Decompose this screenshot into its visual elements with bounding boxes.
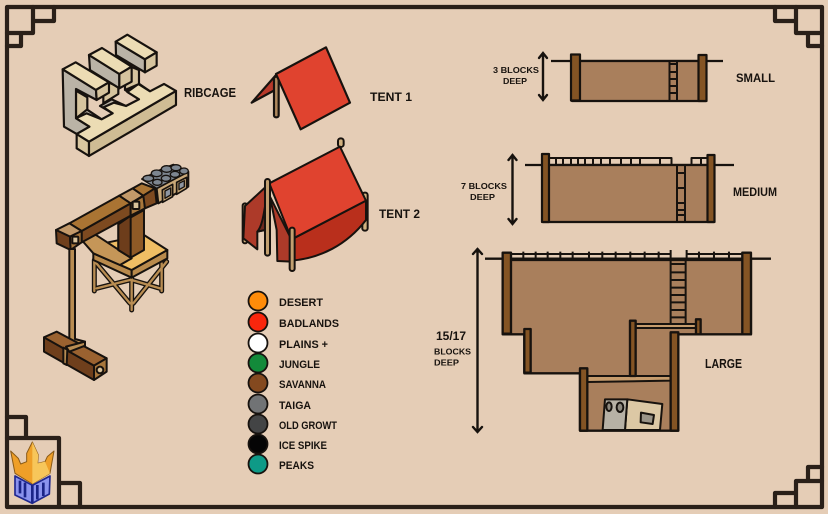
legend: taiga — [248, 394, 311, 414]
large pit ladder — [671, 259, 686, 323]
medium pit diagram — [525, 154, 734, 222]
crane post — [118, 210, 144, 258]
tent 1 flap — [252, 75, 276, 103]
legend: ice spike: ICE SPIKE — [279, 440, 327, 452]
large pit chests — [603, 399, 662, 430]
label: 15/17 blocks deep: DEEP — [434, 358, 459, 368]
label: 15/17 blocks deep: BLOCKS — [434, 346, 471, 356]
legend: ice spike — [248, 434, 327, 454]
legend: biome colours — [248, 292, 339, 474]
legend: old growth: OLD GROWT — [279, 420, 337, 432]
crane hanging log — [44, 332, 107, 380]
tent 2 left wall — [243, 187, 292, 262]
tent 1 — [252, 47, 350, 129]
label: tent 1: TENT 1 — [370, 90, 412, 104]
tent 1 roof — [276, 47, 350, 129]
crane rope — [64, 249, 85, 365]
legend: savanna — [248, 374, 326, 392]
label: 3 blocks deep: DEEP — [503, 76, 527, 86]
legend: plains: PLAINS + — [279, 339, 328, 351]
tent 2 back poles — [243, 138, 368, 243]
ribcage grey floor shadows — [76, 83, 150, 130]
small pit ladder — [670, 61, 677, 101]
legend: badlands: BADLANDS — [279, 318, 339, 330]
medium pit ladder — [677, 165, 685, 222]
label: ribcage: RIBCAGE — [184, 86, 236, 100]
small pit body — [572, 61, 706, 101]
legend: badlands — [248, 312, 339, 332]
label: medium: MEDIUM — [733, 185, 777, 199]
legend: peaks: PEAKS — [279, 460, 314, 472]
legend: old growth — [248, 414, 337, 434]
legend: desert: DESERT — [279, 297, 323, 309]
label: 3 blocks deep: 3 BLOCKS — [493, 65, 539, 75]
legend: desert — [248, 292, 323, 310]
legend: jungle: JUNGLE — [279, 359, 320, 371]
large pit body — [503, 260, 751, 431]
large pit fence — [511, 250, 742, 259]
crane platform — [82, 234, 167, 278]
small pit posts — [571, 54, 706, 101]
legend: taiga: TAIGA — [279, 400, 311, 412]
tent 1 pole — [274, 77, 279, 117]
legend: jungle — [248, 354, 320, 372]
crane structure — [44, 164, 188, 380]
tent 2 front poles — [265, 179, 295, 271]
label: 15/17 blocks deep: 15/17 — [436, 329, 466, 343]
label: small: SMALL — [736, 71, 775, 85]
label: tent 2: TENT 2 — [379, 207, 420, 221]
large pit planks — [587, 324, 696, 382]
tent 2 roof — [269, 147, 366, 239]
tent 2 right wall — [292, 201, 366, 261]
medium pit fence — [549, 158, 707, 165]
rib three — [116, 35, 157, 90]
crane beam — [56, 183, 157, 250]
legend: savanna: SAVANNA — [279, 379, 326, 391]
legend: peaks — [248, 454, 314, 474]
rib two — [89, 48, 132, 103]
logo: crown on blue block — [11, 442, 54, 503]
tent 2 — [243, 138, 368, 271]
medium pit body — [543, 165, 714, 222]
medium depth arrow — [508, 155, 516, 224]
label: 7 blocks deep: 7 BLOCKS — [461, 181, 507, 191]
ribcage spine top — [76, 84, 176, 142]
legend: plains — [248, 334, 328, 352]
small pit diagram — [551, 54, 723, 101]
crane counterweight stones — [142, 164, 188, 203]
large depth arrow — [473, 249, 482, 432]
ribcage structure — [63, 35, 176, 156]
ribcage base front end — [77, 134, 89, 156]
crane platform legs — [94, 260, 167, 310]
small depth arrow — [539, 53, 547, 100]
ribcage base long side — [89, 91, 176, 156]
large pit diagram — [485, 250, 771, 431]
label: large: LARGE — [705, 357, 742, 371]
medium pit posts — [542, 154, 714, 222]
label: 7 blocks deep: DEEP — [470, 192, 495, 202]
large pit posts — [503, 253, 751, 431]
rib one — [63, 62, 109, 134]
